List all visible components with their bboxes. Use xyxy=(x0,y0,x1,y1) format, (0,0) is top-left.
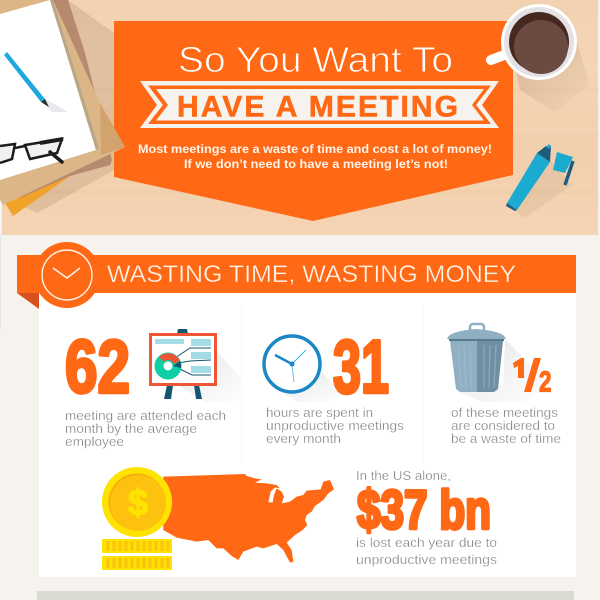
icon: wall clock xyxy=(264,336,342,402)
caption: are considered to xyxy=(451,419,555,433)
map of the United States xyxy=(163,474,334,563)
caption xyxy=(266,406,404,446)
icon: clock badge xyxy=(34,242,100,308)
next section panel edge xyxy=(37,591,574,600)
caption xyxy=(65,409,226,449)
caption: unproductive meetings xyxy=(266,419,404,433)
header subtitle: Most meetings are a waste of time and cost a lot of money! xyxy=(138,144,492,156)
orange header banner xyxy=(114,21,513,221)
header subtitle xyxy=(138,144,492,171)
icon: glasses xyxy=(0,139,63,163)
header subtitle: If we don’t need to have a meeting let’s not! xyxy=(184,159,448,171)
stat: 31 hours: 31 xyxy=(333,324,389,408)
stat: 37 billion dollars: $37 bn xyxy=(357,478,491,540)
caption: be a waste of time xyxy=(451,432,561,446)
stat: 37 billion dollars: is lost each year due to xyxy=(356,536,497,550)
stat: 62 meetings: 62 xyxy=(65,324,130,408)
panel: statistics xyxy=(39,293,576,577)
title: So You Want To: So You Want To xyxy=(178,39,453,80)
title ribbon: have a meeting: HAVE A MEETING xyxy=(177,90,458,124)
header: wooden desk xyxy=(0,0,600,330)
caption: every month xyxy=(266,432,341,446)
stat: 62 meetings xyxy=(65,324,241,449)
desk items: papers and folder stack xyxy=(0,0,125,216)
icon: trash can xyxy=(447,324,550,402)
icon: gold coin and stacked coins xyxy=(102,467,172,570)
stat: 31 hours xyxy=(264,324,404,446)
icon: presentation board xyxy=(150,329,241,402)
caption xyxy=(451,406,561,446)
section heading: WASTING TIME, WASTING MONEY xyxy=(107,261,516,288)
title ribbon: have a meeting xyxy=(140,81,499,128)
stat: one half xyxy=(447,324,561,446)
stat: 37 billion dollars: In the US alone, xyxy=(356,469,451,483)
section banner: wasting time, wasting money xyxy=(17,242,576,309)
icon: blue highlighter xyxy=(506,144,573,218)
caption: hours are spent in xyxy=(266,406,373,420)
caption: of these meetings xyxy=(451,406,558,420)
icon: gold coin and stacked coins: $ xyxy=(128,482,148,523)
icon: blue pencil xyxy=(4,52,49,107)
caption: month by the average xyxy=(65,422,197,436)
stat: 37 billion dollars xyxy=(356,469,497,567)
caption: meeting are attended each xyxy=(65,409,226,423)
icon: coffee cup xyxy=(491,4,590,112)
one half numeral: 2 xyxy=(539,366,552,398)
caption: employee xyxy=(65,435,124,449)
stat: 37 billion dollars: unproductive meetings xyxy=(356,553,497,567)
